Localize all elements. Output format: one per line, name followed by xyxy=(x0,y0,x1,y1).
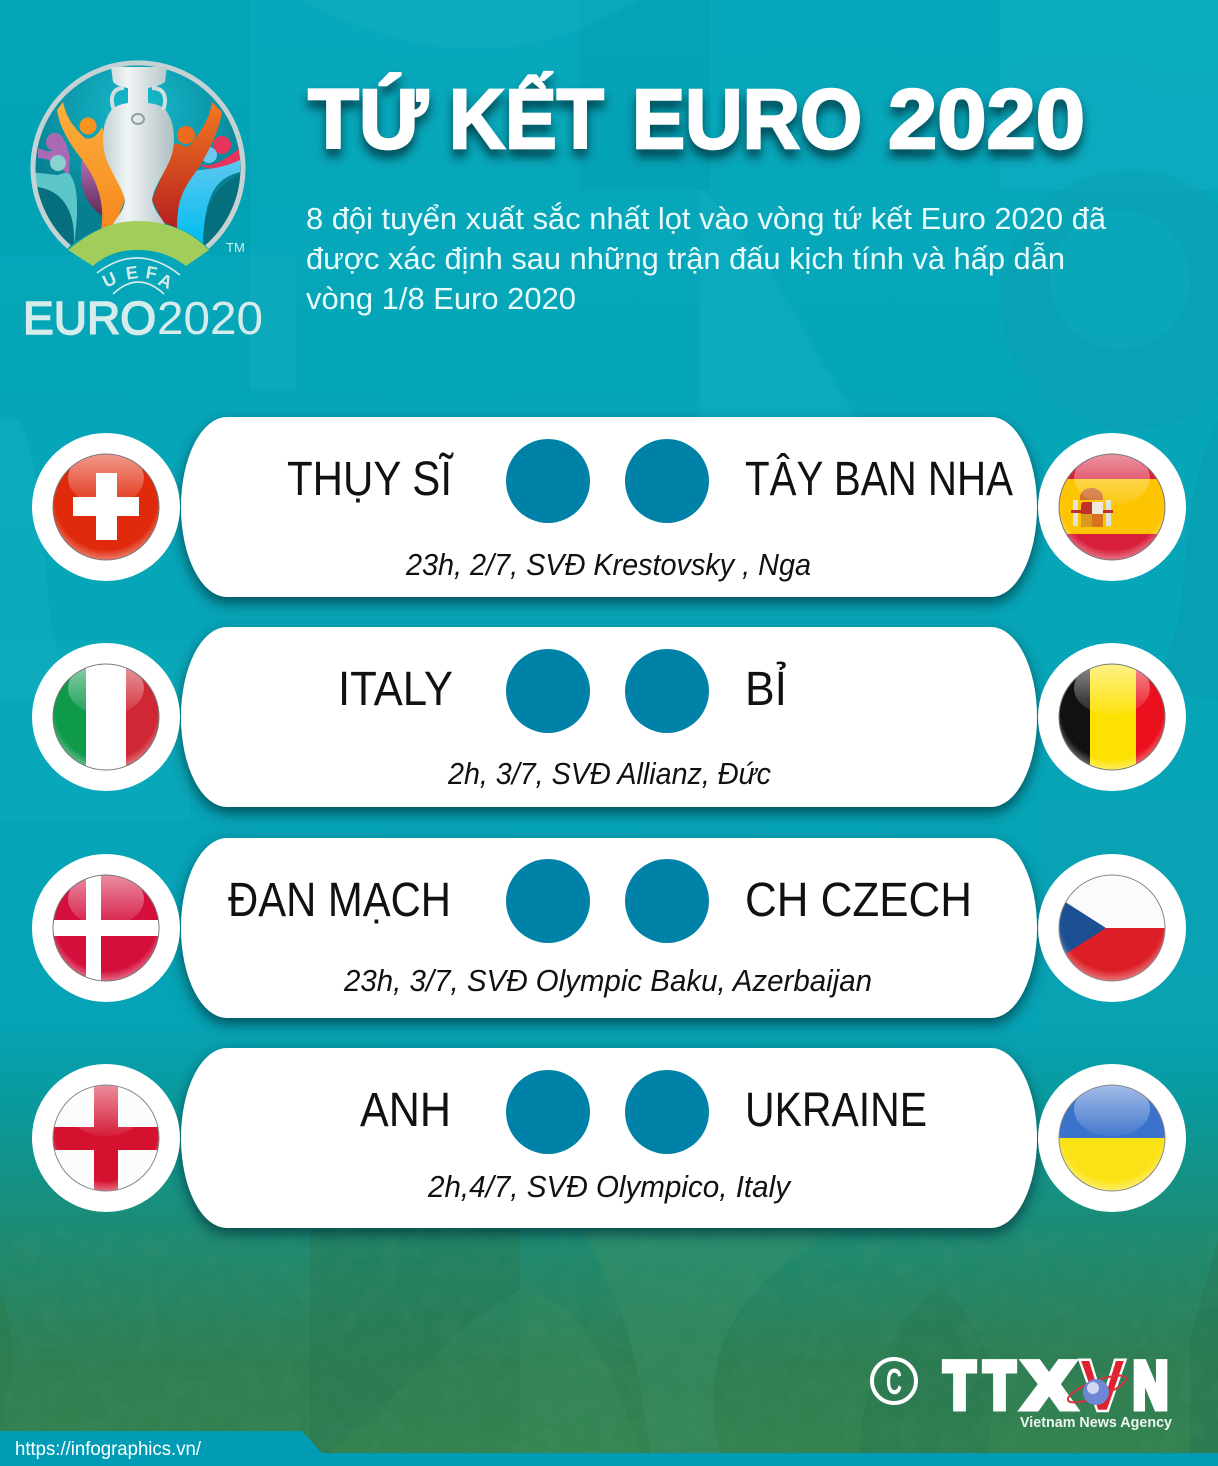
flag: Czech Republic xyxy=(1038,854,1186,1002)
score circle right xyxy=(625,1070,709,1154)
intro text xyxy=(306,201,1107,316)
score circle left xyxy=(506,439,590,523)
title: KẾT xyxy=(449,72,604,166)
score circle right xyxy=(625,439,709,523)
green arc xyxy=(68,221,209,266)
team name right: CH CZECH xyxy=(745,874,972,927)
match 2: Italy - Bỉ xyxy=(32,627,1186,807)
score circle left xyxy=(506,1070,590,1154)
score circle left xyxy=(506,649,590,733)
score circle right xyxy=(625,859,709,943)
Euro2020 wordmark: EURO xyxy=(23,292,156,344)
match info: 23h, 2/7, SVĐ Krestovsky , Nga xyxy=(405,547,811,582)
globe xyxy=(1065,1370,1129,1408)
flag: Ukraine xyxy=(1038,1064,1186,1212)
flag: Denmark xyxy=(32,854,180,1002)
orange figure xyxy=(57,102,125,230)
match 4: Anh - Ukraine xyxy=(32,1048,1186,1228)
panel xyxy=(181,838,1037,1018)
agency name: Vietnam News Agency xyxy=(1020,1415,1172,1431)
team name left: ITALY xyxy=(338,663,453,716)
match info: 2h,4/7, SVĐ Olympico, Italy xyxy=(427,1169,792,1204)
UEFA arcs and text: A xyxy=(155,269,176,293)
logo: TTXVN: N xyxy=(1133,1348,1168,1422)
right figures xyxy=(177,204,179,218)
logo badge xyxy=(30,63,243,266)
title: EURO xyxy=(632,72,862,166)
title xyxy=(308,72,1085,166)
copyright symbol: C xyxy=(886,1361,902,1402)
match info: 2h, 3/7, SVĐ Allianz, Đức xyxy=(447,756,771,791)
logo: UEFA Euro 2020 xyxy=(23,63,263,344)
coat of arms xyxy=(1071,488,1113,527)
red V: V xyxy=(1079,1344,1126,1427)
match info: 23h, 3/7, SVĐ Olympic Baku, Azerbaijan xyxy=(343,963,872,998)
footer bar xyxy=(0,1431,1218,1466)
team name right: UKRAINE xyxy=(745,1084,927,1137)
flag: England xyxy=(32,1064,180,1212)
copyright symbol xyxy=(872,1359,916,1403)
flag: Italy xyxy=(32,643,180,791)
UEFA arcs and text: U xyxy=(99,268,120,292)
flag: Spain xyxy=(1038,433,1186,581)
team name right: TÂY BAN NHA xyxy=(745,453,1013,506)
score circle left xyxy=(506,859,590,943)
logo: TTXVN xyxy=(944,1344,1172,1431)
team name left: THỤY SĨ xyxy=(287,452,454,506)
flag: Switzerland xyxy=(32,433,180,581)
intro text: vòng 1/8 Euro 2020 xyxy=(306,281,576,316)
red figure xyxy=(152,102,222,228)
flag: Belgium xyxy=(1038,643,1186,791)
panel xyxy=(181,417,1037,597)
logo: TTXVN: T xyxy=(944,1348,975,1422)
intro text: được xác định sau những trận đấu kịch tính và hấp dẫn xyxy=(306,241,1065,276)
team name left: ANH xyxy=(360,1084,451,1137)
title: 2020 xyxy=(888,72,1085,166)
teal figure left xyxy=(36,172,78,245)
team name left: ĐAN MẠCH xyxy=(228,874,451,927)
logo: TTXVN: X xyxy=(1024,1348,1074,1422)
match 3: Đan Mạch - CH Czech xyxy=(32,838,1186,1018)
panel xyxy=(181,1048,1037,1228)
logo: TTXVN: T xyxy=(984,1348,1015,1422)
website url: https://infographics.vn/ xyxy=(15,1439,202,1460)
title: TỨ xyxy=(308,72,428,166)
match 1: Thụy Sĩ - Tây Ban Nha xyxy=(32,417,1186,597)
team name right: BỈ xyxy=(745,661,787,716)
score circle right xyxy=(625,649,709,733)
badge ring xyxy=(33,63,243,247)
UEFA arcs and text: F xyxy=(144,262,159,284)
Euro2020 wordmark xyxy=(23,292,263,344)
panel xyxy=(181,627,1037,807)
trophy xyxy=(103,67,174,224)
UEFA arcs and text xyxy=(97,258,180,294)
UEFA arcs and text: E xyxy=(125,262,139,284)
Euro2020 wordmark: 2020 xyxy=(157,292,263,344)
trademark: TM xyxy=(226,240,245,255)
intro text: 8 đội tuyển xuất sắc nhất lọt vào vòng tứ kết Euro 2020 đã xyxy=(306,201,1107,236)
